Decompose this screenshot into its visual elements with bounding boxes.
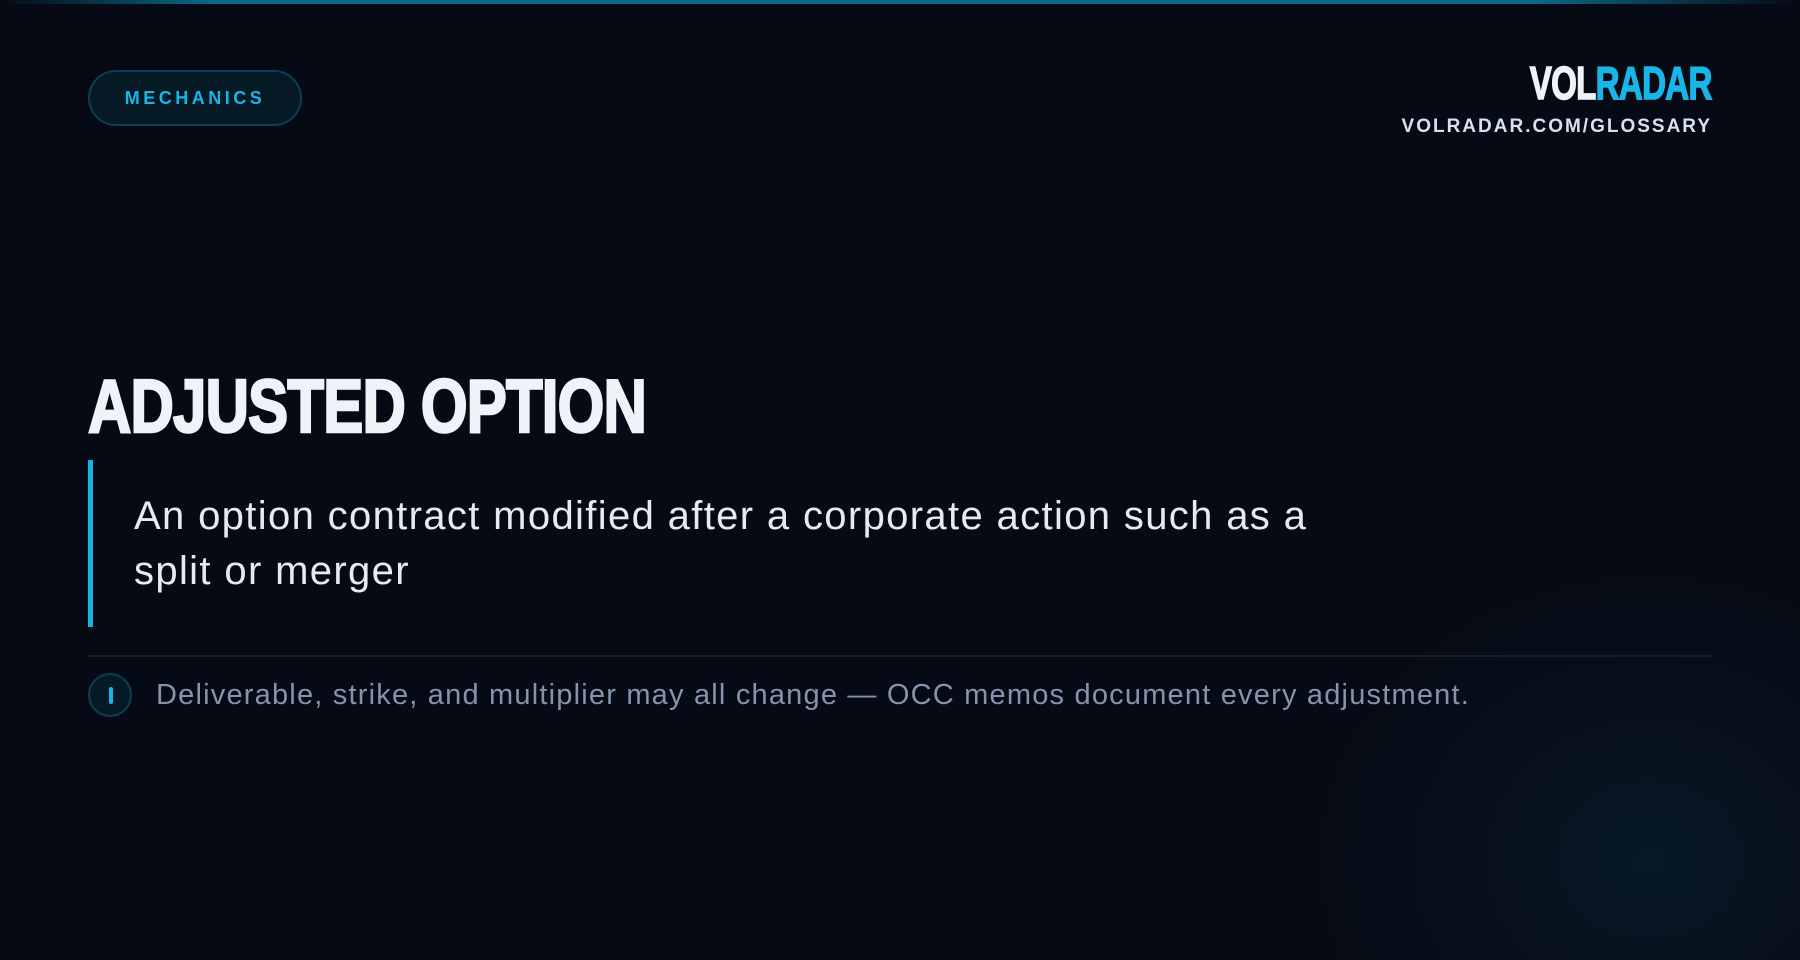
definition text — [134, 494, 1307, 593]
logo: VOLRADAR — [1530, 57, 1712, 109]
category pill — [88, 70, 302, 126]
note text: Deliverable, strike, and multiplier may all change — OCC memos document every adjustment. — [156, 678, 1470, 710]
definition quote — [88, 460, 1393, 627]
definition text: An option contract modified after a corporate action such as a — [134, 494, 1307, 538]
category pill: MECHANICS — [125, 88, 265, 108]
note row — [88, 673, 1470, 717]
definition text: split or merger — [134, 549, 410, 593]
brand block — [1402, 57, 1713, 137]
icon: info — [88, 673, 132, 717]
title: ADJUSTED OPTION — [88, 364, 646, 448]
url: VOLRADAR.COM/GLOSSARY — [1402, 116, 1712, 137]
